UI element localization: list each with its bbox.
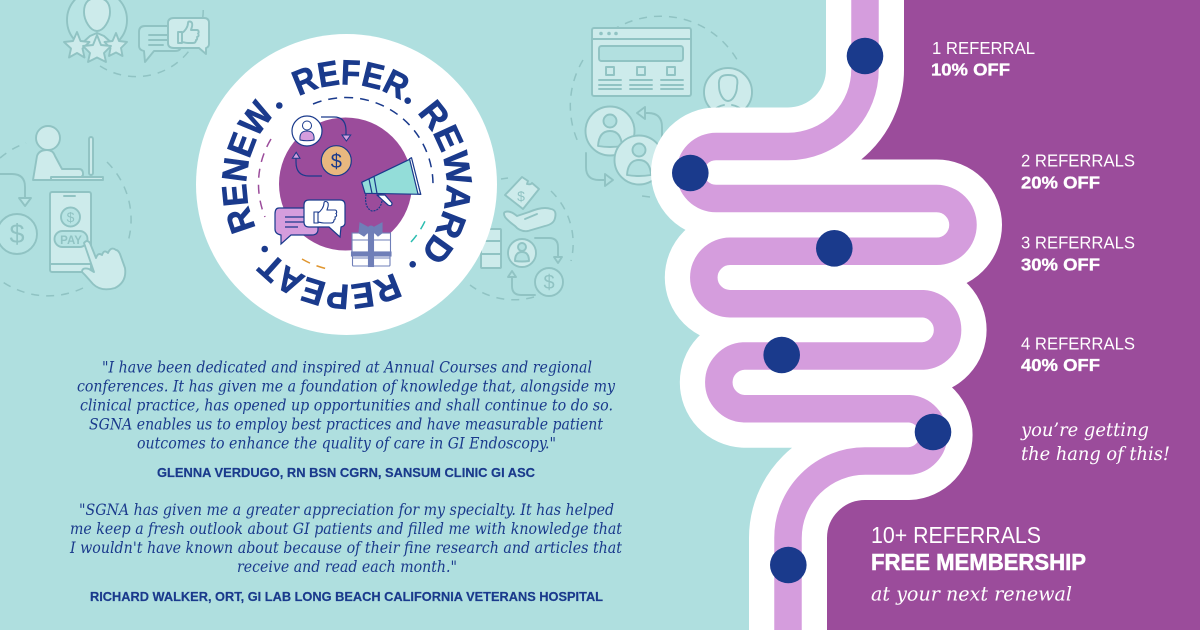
- milestone dot 5: [915, 414, 951, 450]
- icon group: money in hand: [470, 177, 573, 300]
- attribution 1: GLENNA VERDUGO, RN BSN CGRN, SANSUM CLINIC GI ASC: [157, 465, 536, 480]
- testimonial 1: clinical practice, has opened up opportunities and shall continue to do so.: [80, 396, 613, 414]
- icon: arrow to person: [292, 152, 322, 176]
- encouragement text: [1020, 419, 1170, 465]
- milestone dot 6: [770, 547, 807, 583]
- milestone dot 1: [847, 38, 883, 74]
- icon: dollar coin: $: [331, 151, 342, 173]
- word: renew: RENEW: [222, 98, 272, 234]
- icon: arrow to dollar: [321, 117, 351, 141]
- tier: 10+ referrals: [871, 522, 1086, 606]
- winding path: [690, 0, 963, 630]
- purple panel: [690, 0, 1200, 630]
- tier: 4 referrals: [1021, 334, 1135, 375]
- tier: 2 referrals: [1021, 151, 1135, 193]
- icon: small dollar: $: [67, 209, 75, 225]
- tier: 1 referral: [931, 38, 1035, 80]
- tier: 2 referrals: 2 REFERRALS: [1021, 151, 1135, 171]
- testimonial 2: [69, 500, 623, 576]
- label: pay: PAY: [60, 235, 82, 247]
- testimonial 2: receive and read each month.": [237, 557, 457, 576]
- word: repeat: REPEAT: [256, 256, 402, 310]
- tier: 4 referrals: 4 REFERRALS: [1021, 334, 1135, 354]
- icon group: online payment: [0, 126, 131, 296]
- tier: 10+ referrals: at your next renewal: [871, 582, 1072, 606]
- testimonial 1: "I have been dedicated and inspired at Annual Courses and regional: [102, 358, 592, 376]
- tier: 10+ referrals: 10+ REFERRALS: [871, 522, 1041, 548]
- icon group: reviews and feedback: [64, 0, 209, 77]
- tier: 1 referral: 10% OFF: [931, 60, 1010, 80]
- icon group: website and people: [570, 16, 752, 197]
- tier: 4 referrals: 40% OFF: [1021, 355, 1100, 375]
- icon: thumbs up bubble: [304, 200, 345, 237]
- icon: puzzle dollar: $: [517, 188, 525, 204]
- testimonial 2: "SGNA has given me a greater appreciation for my specialty. It has helped: [79, 500, 614, 519]
- testimonial 1: outcomes to enhance the quality of care in GI Endoscopy.": [137, 434, 556, 452]
- attribution 2: RICHARD WALKER, ORT, GI LAB LONG BEACH CALIFORNIA VETERANS HOSPITAL: [90, 589, 603, 604]
- tier: 3 referrals: [1021, 233, 1135, 275]
- icon: chat bubble with lines: [275, 208, 318, 244]
- encouragement text: you’re getting: [1020, 419, 1149, 441]
- word: refer: REFER: [291, 60, 408, 100]
- tier: 2 referrals: 20% OFF: [1021, 173, 1100, 193]
- testimonial 1: SGNA enables us to employ best practices and have measurable patient: [89, 414, 604, 434]
- tier: 10+ referrals: FREE MEMBERSHIP: [871, 549, 1086, 575]
- testimonial 1: conferences. It has given me a foundation of knowledge that, alongside my: [77, 376, 616, 396]
- tier: 3 referrals: 30% OFF: [1021, 255, 1100, 275]
- dashed inner ring: [258, 97, 433, 269]
- milestone dot 4: [763, 337, 800, 373]
- badge: renew refer reward repeat: [196, 34, 497, 335]
- icon: dollar coin small: $: [543, 272, 555, 294]
- icon: dollar coin: $: [9, 219, 25, 249]
- milestone dot 3: [816, 230, 853, 267]
- testimonial 2: me keep a fresh outlook about GI patients and filled me with knowledge that: [70, 519, 623, 538]
- icon: dollar coin: [321, 146, 351, 176]
- testimonial 1: [77, 358, 616, 452]
- tier: 1 referral: 1 REFERRAL: [932, 38, 1035, 58]
- icon: megaphone: [362, 158, 421, 211]
- testimonial 2: I wouldn't have known about because of their fine research and articles that: [69, 538, 623, 557]
- ring separator dots: [261, 97, 416, 268]
- icon: gift box: [352, 223, 391, 266]
- encouragement text: the hang of this!: [1021, 443, 1170, 465]
- milestone dot 2: [672, 155, 709, 191]
- word: reward: REWARD: [418, 99, 472, 262]
- tier: 3 referrals: 3 REFERRALS: [1021, 233, 1135, 253]
- icon: person: [292, 116, 322, 146]
